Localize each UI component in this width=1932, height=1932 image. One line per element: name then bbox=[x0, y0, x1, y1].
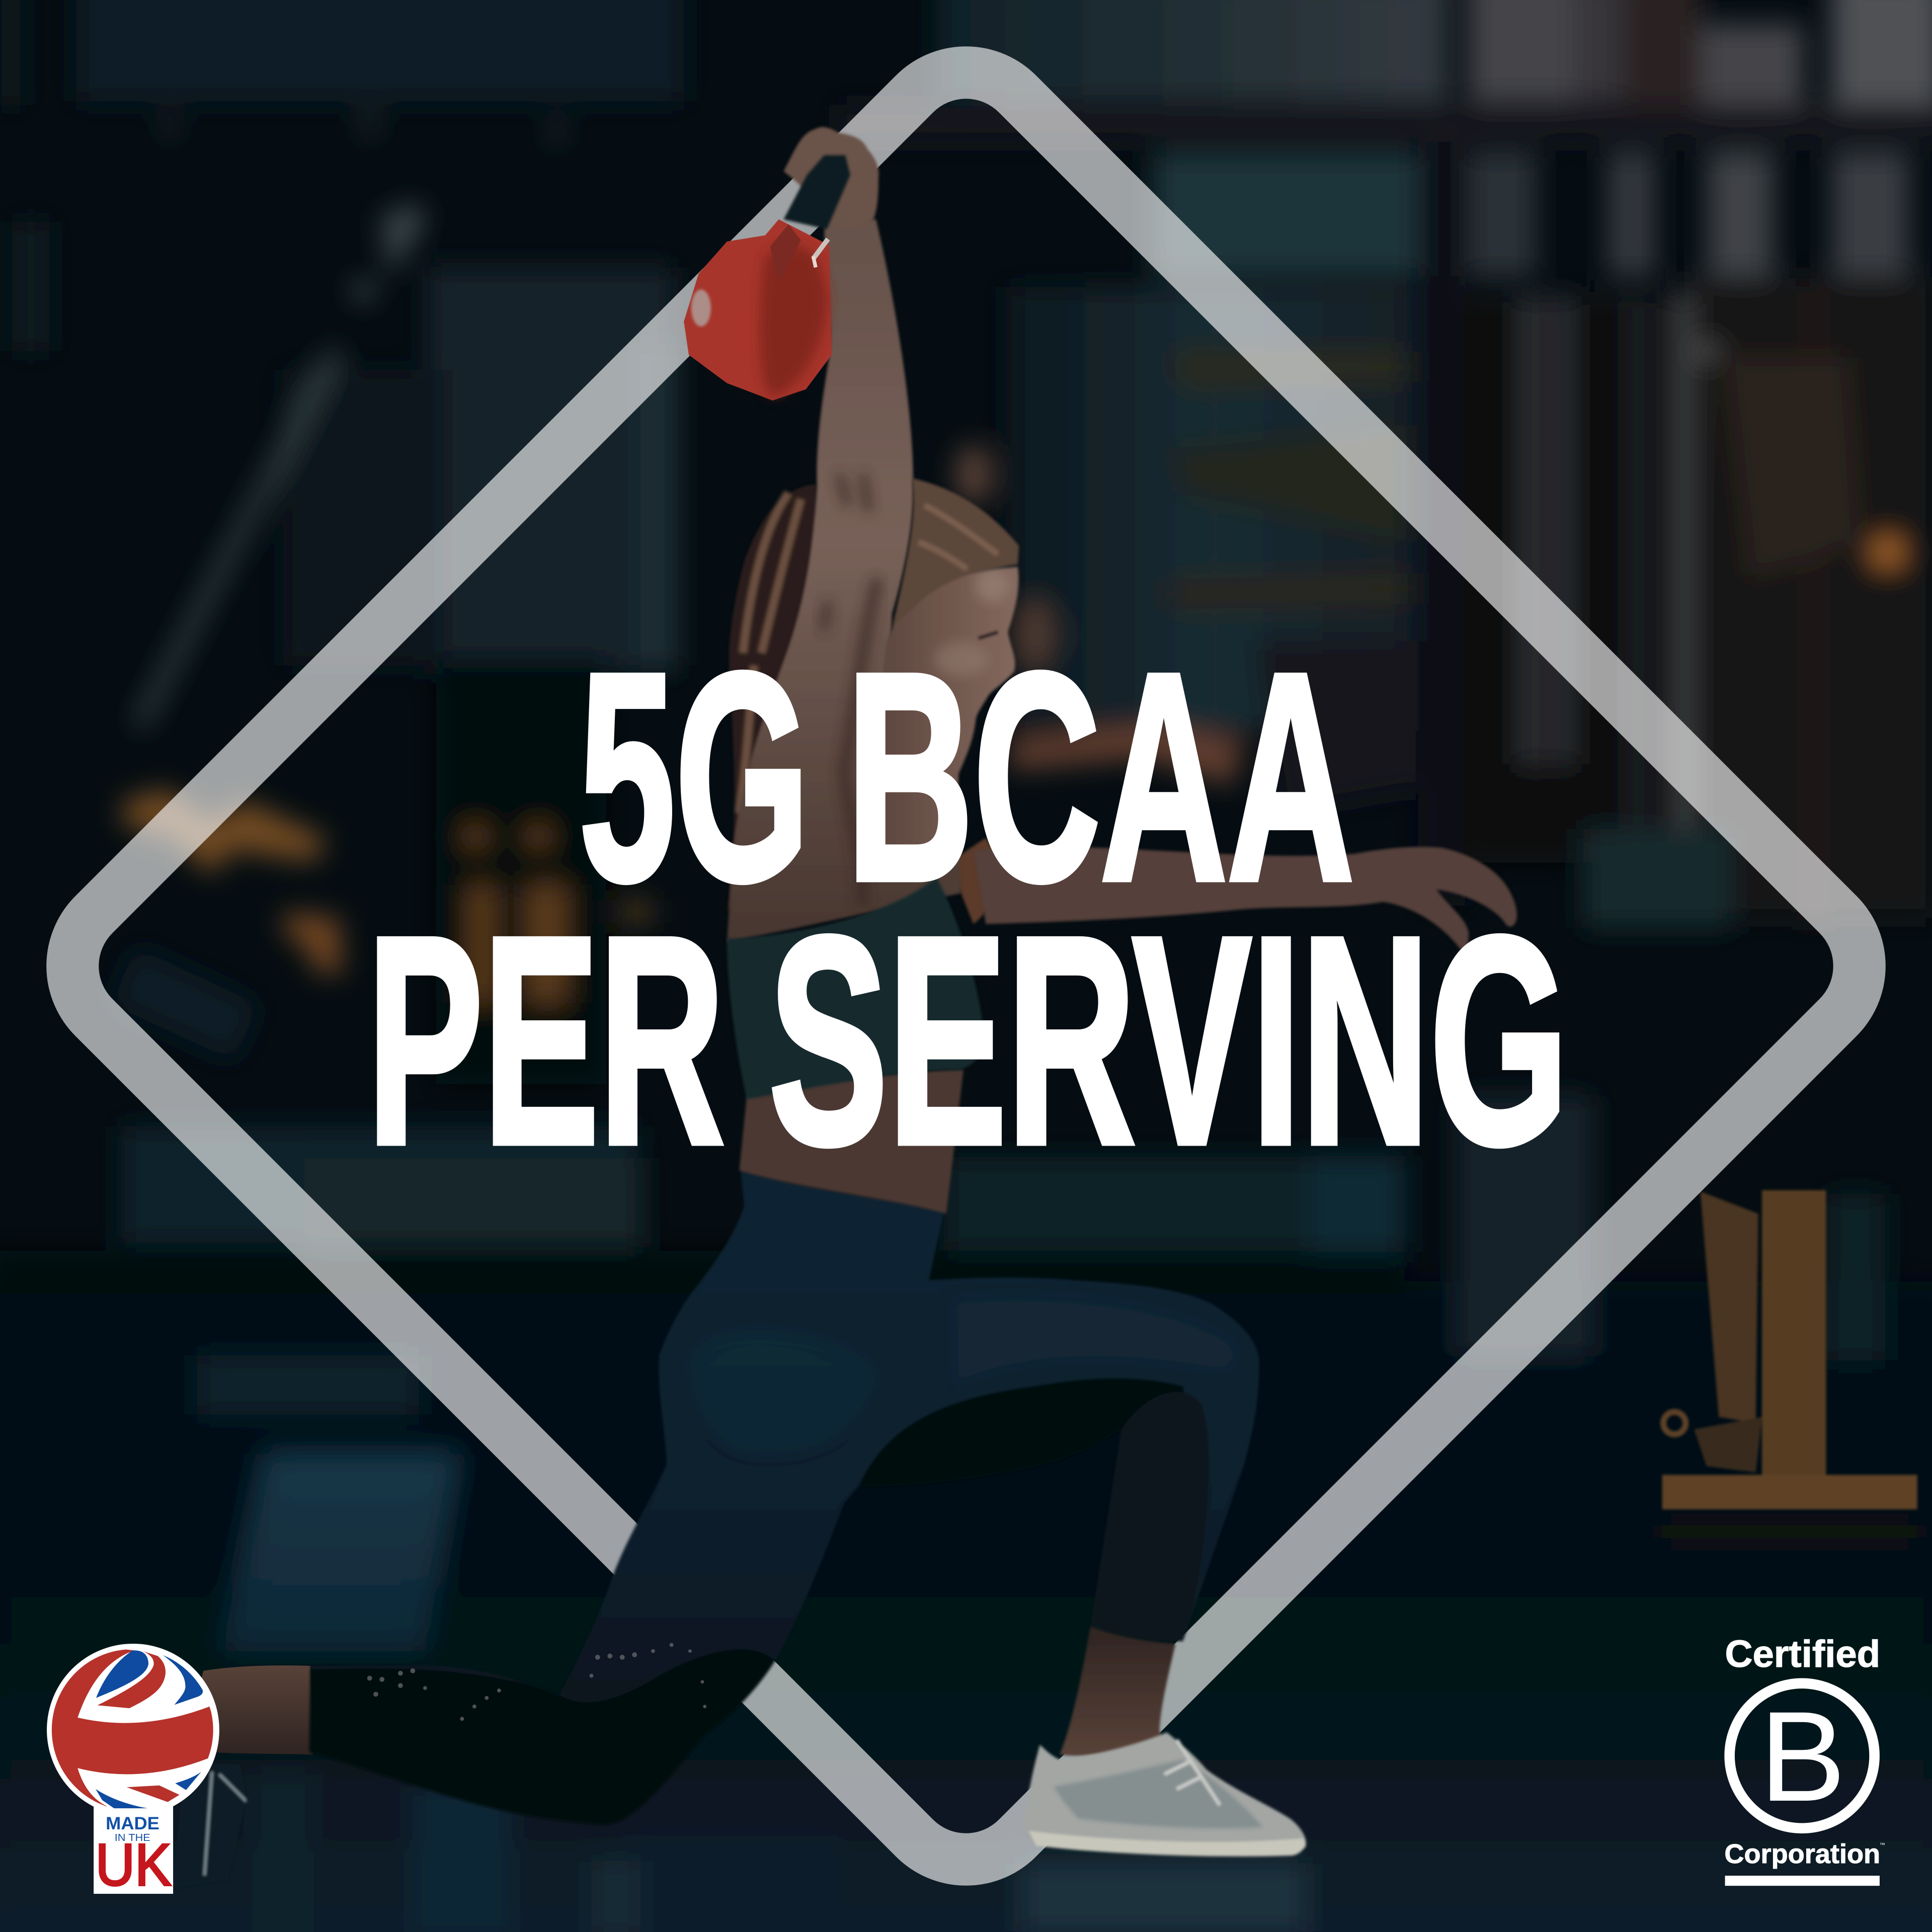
midriff bbox=[739, 1070, 963, 1214]
back crease shading bbox=[823, 474, 877, 906]
thigh underside shadow bbox=[859, 1378, 1184, 1486]
title: 5G BCAA per serving: PER bbox=[367, 875, 725, 1205]
front leg skin bbox=[1060, 1627, 1175, 1756]
back shoe bbox=[173, 1762, 247, 1888]
leggings perforations bbox=[367, 1643, 706, 1721]
sports bra bbox=[727, 877, 986, 1099]
badge: Certified B Corporation: ™ bbox=[1880, 1842, 1885, 1848]
extended arm bbox=[974, 847, 1517, 951]
head bbox=[862, 478, 1019, 862]
title: 5G BCAA per serving: BCAA bbox=[846, 611, 1354, 942]
badge: Certified B Corporation: Corporation bbox=[1724, 1839, 1880, 1869]
title: 5G BCAA per serving bbox=[367, 611, 1569, 1205]
badge: Certified B Corporation bbox=[1724, 1633, 1885, 1886]
back leg skin bbox=[185, 1665, 313, 1754]
badge: Certified B Corporation: B bbox=[1759, 1684, 1846, 1828]
front shoe bbox=[1024, 1732, 1306, 1857]
hand gripping kettlebell bbox=[784, 127, 879, 229]
athlete in lunge with kettlebell bbox=[173, 127, 1517, 1888]
badge: Certified B Corporation: Certified bbox=[1725, 1633, 1880, 1675]
badge: Made in the UK bbox=[37, 1639, 219, 1898]
lower back-leg shadow bbox=[309, 1649, 775, 1825]
kettlebell bbox=[684, 219, 832, 400]
leggings bbox=[309, 1169, 1259, 1825]
badge: Made in the UK: IN THE bbox=[115, 1832, 150, 1843]
title: 5G BCAA per serving: 5G bbox=[579, 611, 810, 942]
shin shadow bbox=[1090, 1392, 1209, 1641]
badge: Made in the UK: UK bbox=[96, 1832, 171, 1898]
front thigh highlight bbox=[955, 1298, 1237, 1386]
hair ponytail bbox=[727, 484, 998, 924]
badge: Made in the UK: MADE bbox=[106, 1814, 159, 1833]
glute highlight bbox=[690, 1331, 877, 1454]
kettlebell arm and torso bbox=[727, 217, 961, 942]
kettlebell handle bbox=[784, 155, 850, 229]
